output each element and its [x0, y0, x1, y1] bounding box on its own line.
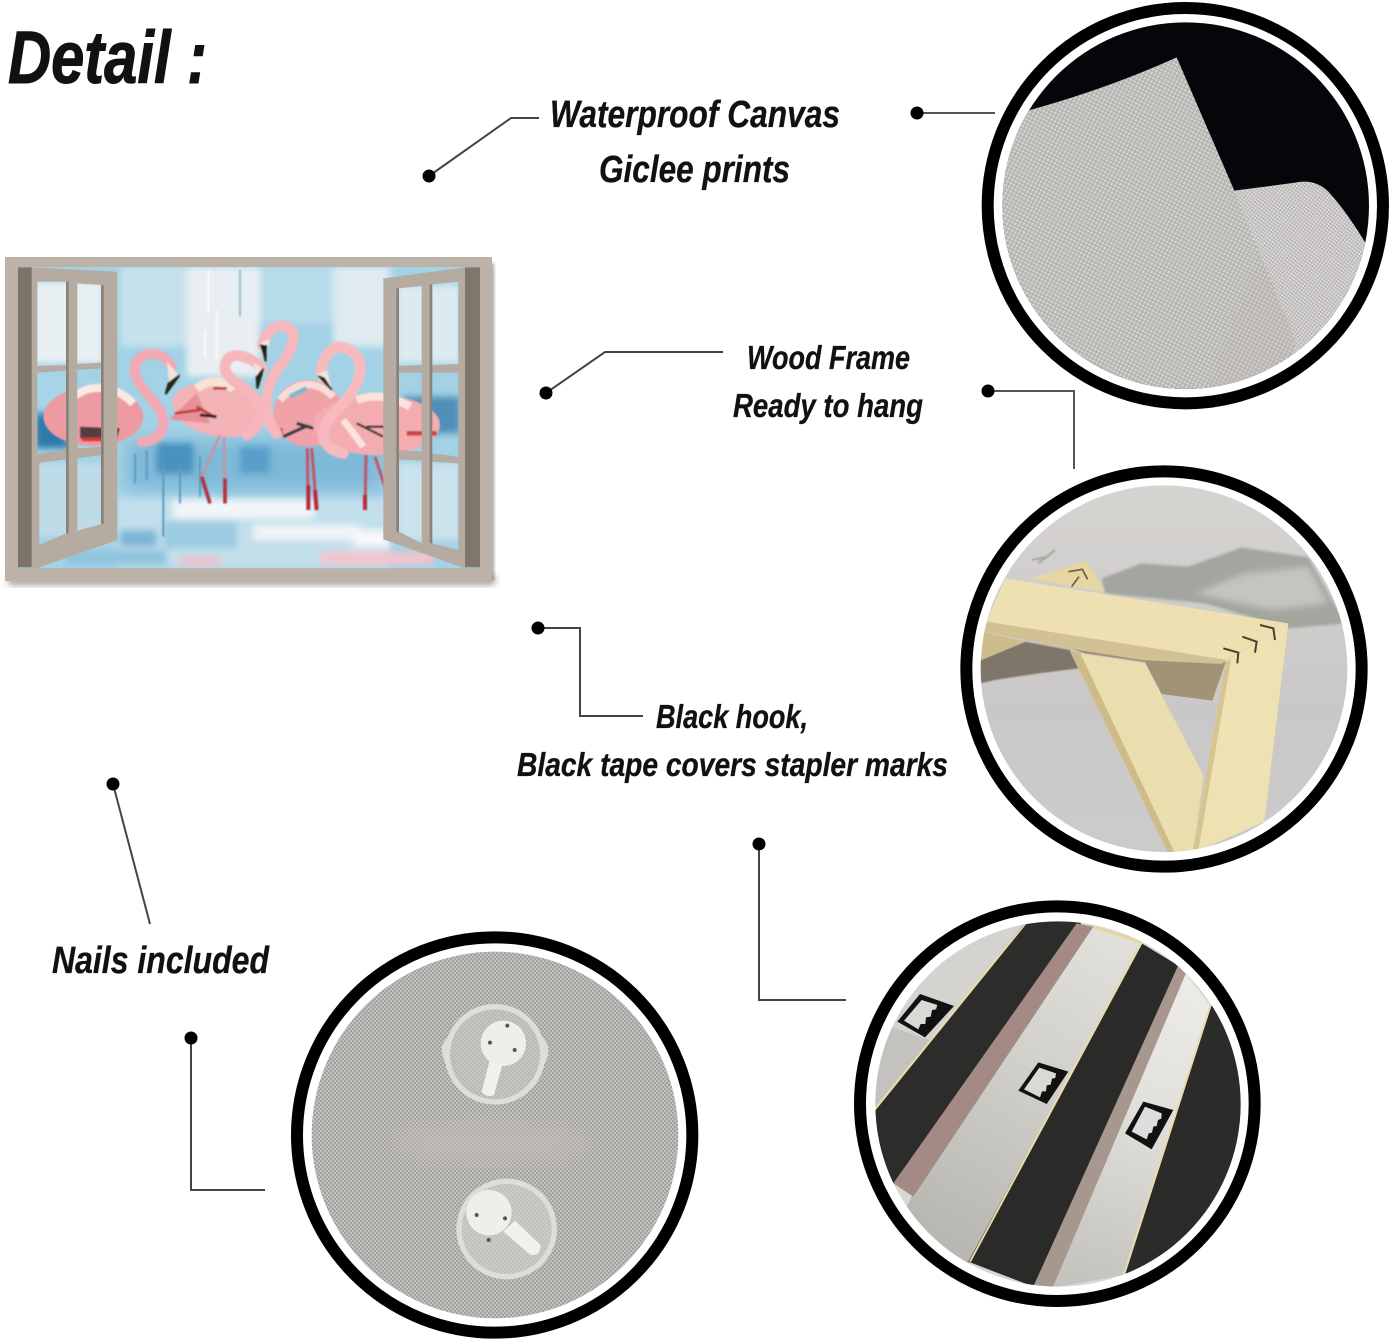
label: waterproof canvas: Giclee prints: [599, 149, 790, 191]
black tape band 3: [1125, 1005, 1250, 1275]
connector: waterproof canvas right: [910, 106, 995, 120]
connector: waterproof canvas left: [422, 118, 539, 182]
label: black hook: Black tape covers stapler marks: [517, 746, 948, 783]
label: wood frame: Ready to hang: [733, 387, 923, 424]
staples: [1223, 625, 1275, 663]
corner wedge: [1032, 561, 1105, 592]
connector: black hook upper: [532, 622, 643, 716]
horizontal bar: [987, 578, 1288, 660]
flamingo 2: [167, 356, 266, 503]
top-left canvas: [892, 925, 1022, 1028]
connector: nails upper: [106, 778, 150, 924]
label: waterproof canvas: Waterproof Canvas: [550, 94, 840, 136]
label: wood frame: [733, 339, 923, 424]
canvas band 2: [1050, 973, 1210, 1288]
connector: nails lower: [184, 1032, 265, 1190]
hanger 2: [459, 1181, 554, 1277]
wood frame outer: [5, 257, 492, 581]
right window sash: [383, 267, 465, 568]
circle: black hook close-up: [860, 906, 1255, 1301]
label: waterproof canvas: [550, 94, 840, 191]
marble stain: [1102, 547, 1345, 628]
diagonal brace: [1070, 651, 1203, 853]
label: black hook: [517, 698, 948, 783]
title: Detail :: [8, 16, 207, 99]
connector: wood frame right: [982, 384, 1074, 469]
sawtooth hangers: [897, 994, 1173, 1149]
flamingos: [43, 326, 440, 510]
top and bottom frame bars: [5, 257, 492, 581]
vertical bar: [1192, 623, 1288, 853]
flamingo 1: [43, 354, 179, 446]
connector: wood frame left: [540, 352, 723, 400]
black tape band 2: [968, 943, 1180, 1287]
shadow under frame: [980, 642, 1078, 683]
flamingo 4: [313, 347, 440, 510]
circle: wood frame close-up: [966, 471, 1362, 867]
left window sash: [32, 267, 117, 570]
canvas band 1: [907, 928, 1139, 1264]
circle: nails close-up: [297, 937, 692, 1333]
front canvas sheet: [995, 57, 1295, 397]
wood edge band 2: [1033, 965, 1187, 1290]
frame reveals: [18, 267, 480, 567]
cream edges: [875, 924, 1211, 1274]
label: wood frame: Wood Frame: [747, 339, 910, 376]
rolled canvas: [1234, 182, 1365, 368]
label: black hook: Black hook,: [656, 698, 808, 735]
label: nails included: Nails included: [52, 940, 270, 982]
connector: black hook lower: [752, 838, 846, 1000]
circle: canvas close-up: [988, 8, 1383, 403]
hanger 1: [442, 1007, 549, 1102]
painting: flamingos through window: [5, 257, 495, 585]
black tape band 1: [870, 920, 1083, 1200]
flamingo 3: [261, 326, 343, 510]
inner shadow: [1070, 648, 1226, 701]
wood edge band 1: [893, 923, 1093, 1197]
